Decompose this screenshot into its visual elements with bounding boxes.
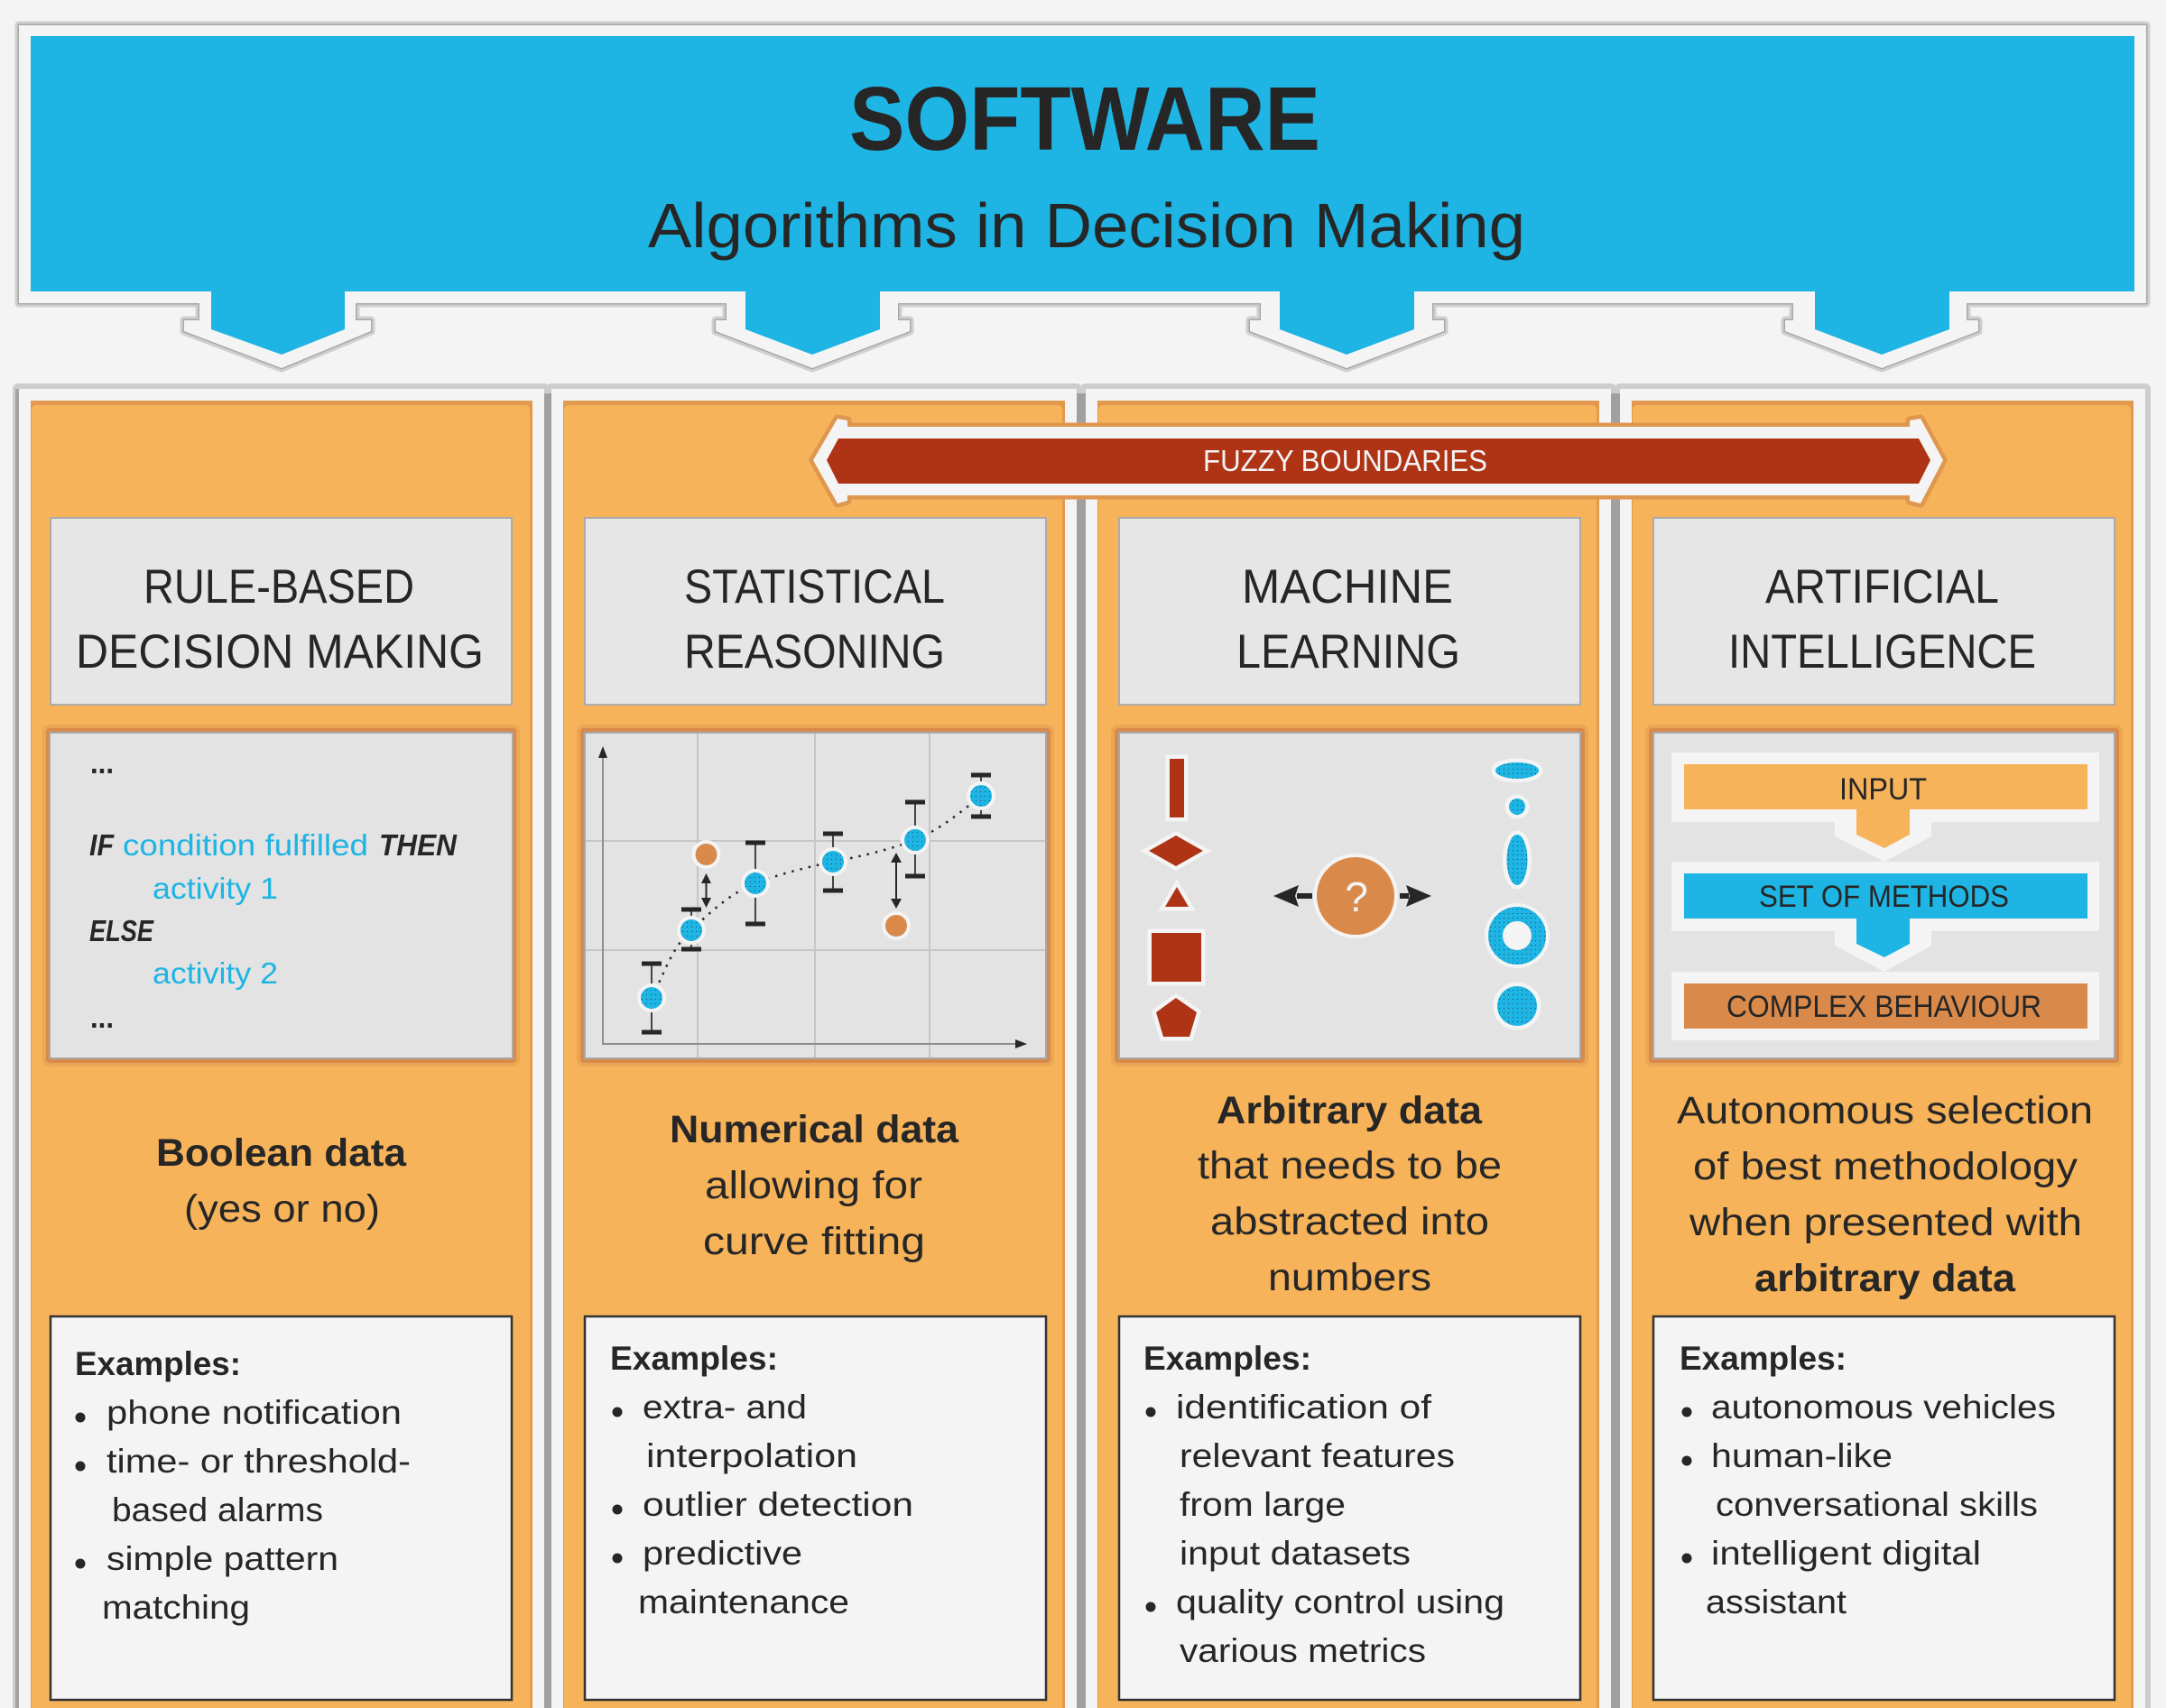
examples: predictive bbox=[643, 1535, 802, 1572]
heading: ARTIFICIAL bbox=[1765, 560, 1999, 614]
examples: human-like bbox=[1711, 1437, 1893, 1474]
flow diagram: input to complex behaviour bbox=[1645, 725, 2123, 1066]
heading: STATISTICAL bbox=[684, 560, 945, 614]
arrow: fuzzy boundaries bbox=[813, 419, 1943, 503]
code illustration: condition fulfilled bbox=[123, 828, 368, 862]
examples: Examples: bbox=[1680, 1340, 1847, 1377]
description: Arbitrary data bbox=[1217, 1089, 1483, 1132]
examples: maintenance bbox=[638, 1583, 849, 1620]
heading: LEARNING bbox=[1236, 625, 1460, 679]
description bbox=[156, 1131, 407, 1231]
code illustration: ELSE bbox=[89, 914, 154, 947]
examples: phone notification bbox=[106, 1394, 402, 1431]
examples bbox=[1119, 1316, 1580, 1700]
code illustration: ... bbox=[90, 1001, 114, 1034]
column backgrounds bbox=[13, 383, 2151, 1708]
description: of best methodology bbox=[1693, 1145, 2078, 1188]
description bbox=[1198, 1089, 1502, 1299]
title: SOFTWARE bbox=[849, 69, 1320, 170]
heading: MACHINE bbox=[1242, 560, 1453, 614]
flow diagram: input to complex behaviour: SET OF METHODS bbox=[1759, 880, 2009, 914]
description: allowing for bbox=[705, 1164, 922, 1207]
heading bbox=[1653, 518, 2115, 705]
examples: Examples: bbox=[1143, 1340, 1311, 1377]
code illustration: IF bbox=[89, 828, 115, 862]
banner: software title with four arrows bbox=[19, 25, 2146, 368]
description: Boolean data bbox=[156, 1131, 407, 1175]
heading: RULE-BASED bbox=[143, 560, 414, 614]
examples: matching bbox=[102, 1589, 250, 1626]
examples bbox=[585, 1316, 1046, 1700]
panel: rule-based decision making bbox=[42, 518, 520, 1700]
code illustration: activity 2 bbox=[153, 956, 278, 990]
examples: interpolation bbox=[646, 1437, 857, 1474]
description: (yes or no) bbox=[184, 1187, 380, 1231]
description: curve fitting bbox=[703, 1220, 925, 1263]
description: that needs to be bbox=[1198, 1144, 1502, 1187]
description: when presented with bbox=[1689, 1201, 2082, 1244]
description: abstracted into bbox=[1210, 1200, 1489, 1243]
examples: extra- and bbox=[643, 1389, 807, 1426]
examples: input datasets bbox=[1180, 1535, 1411, 1572]
examples: identification of bbox=[1176, 1389, 1432, 1426]
examples bbox=[1653, 1316, 2115, 1700]
examples: autonomous vehicles bbox=[1711, 1389, 2056, 1426]
examples: conversational skills bbox=[1716, 1486, 2038, 1523]
examples: Examples: bbox=[75, 1345, 241, 1382]
code illustration: THEN bbox=[379, 828, 458, 862]
examples: outlier detection bbox=[643, 1486, 913, 1523]
illustration: shapes sorted by unknown classifier bbox=[1111, 725, 1588, 1066]
examples bbox=[51, 1316, 512, 1700]
examples: various metrics bbox=[1180, 1632, 1426, 1669]
examples: quality control using bbox=[1176, 1583, 1504, 1620]
examples: from large bbox=[1180, 1486, 1346, 1523]
description: Numerical data bbox=[670, 1108, 959, 1151]
panel: statistical reasoning bbox=[577, 518, 1054, 1700]
examples: intelligent digital bbox=[1711, 1535, 1981, 1572]
heading bbox=[585, 518, 1046, 705]
panel: artificial intelligence bbox=[1645, 518, 2123, 1700]
description: numbers bbox=[1268, 1256, 1431, 1299]
illustration: shapes sorted by unknown classifier: ? bbox=[1345, 873, 1368, 920]
description: Autonomous selection bbox=[1677, 1089, 2093, 1132]
examples: assistant bbox=[1706, 1583, 1847, 1620]
examples: time- or threshold- bbox=[106, 1443, 411, 1480]
subtitle: Algorithms in Decision Making bbox=[648, 190, 1525, 261]
chart: curve fitting with error bars and outliers bbox=[577, 725, 1054, 1066]
heading bbox=[51, 518, 512, 705]
panel: machine learning bbox=[1111, 518, 1588, 1700]
examples: relevant features bbox=[1180, 1437, 1455, 1474]
code illustration bbox=[42, 725, 520, 1066]
code illustration: activity 1 bbox=[153, 872, 278, 905]
flow diagram: input to complex behaviour: INPUT bbox=[1839, 772, 1927, 807]
examples: simple pattern bbox=[106, 1540, 338, 1577]
examples: Examples: bbox=[610, 1340, 778, 1377]
description bbox=[1677, 1089, 2093, 1300]
flow diagram: input to complex behaviour: COMPLEX BEHAVIOUR bbox=[1726, 990, 2041, 1024]
heading: REASONING bbox=[684, 625, 945, 679]
code illustration: ... bbox=[90, 746, 114, 780]
heading: INTELLIGENCE bbox=[1728, 625, 2036, 679]
description: arbitrary data bbox=[1754, 1257, 2016, 1300]
examples: based alarms bbox=[112, 1491, 323, 1528]
heading: DECISION MAKING bbox=[76, 625, 484, 679]
heading bbox=[1119, 518, 1580, 705]
label: FUZZY BOUNDARIES bbox=[1203, 444, 1487, 477]
description bbox=[670, 1108, 959, 1263]
